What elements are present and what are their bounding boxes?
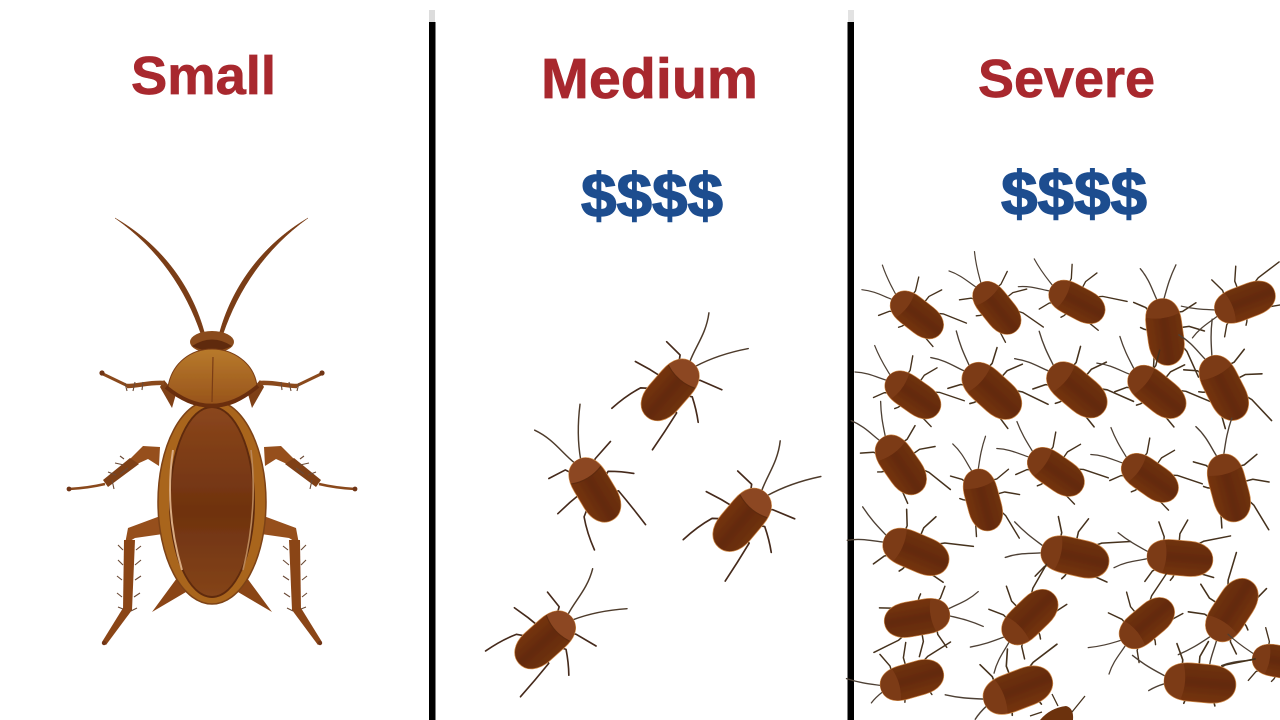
cockroach	[842, 390, 960, 520]
cockroach	[1076, 565, 1199, 682]
cockroach	[938, 632, 1075, 720]
cost: four dollar signs: $$$$	[1001, 160, 1147, 229]
cockroach	[1090, 321, 1219, 443]
cockroach	[957, 556, 1083, 681]
divider: medium / severe	[848, 10, 854, 720]
cockroach	[841, 631, 963, 716]
cockroach	[849, 331, 971, 441]
panel: medium	[474, 47, 830, 709]
cockroach	[515, 398, 659, 560]
cockroach	[1003, 503, 1133, 595]
cockroach	[1174, 251, 1280, 348]
cockroach body	[158, 400, 266, 604]
heading: Medium: Medium	[541, 47, 758, 111]
cockroach	[991, 406, 1115, 519]
cockroach	[599, 297, 757, 461]
icon: large cockroach	[67, 218, 357, 645]
cost: four dollar signs: $$$$	[581, 162, 723, 231]
cockroach pronotum	[166, 349, 258, 407]
cockroach	[941, 240, 1052, 357]
cockroach head	[190, 331, 234, 353]
panel: small	[67, 46, 357, 645]
cockroach	[1085, 412, 1209, 525]
cockroach legs	[67, 370, 357, 645]
cockroach	[1129, 261, 1211, 385]
divider: small / medium	[429, 10, 436, 720]
cockroach	[923, 316, 1057, 445]
cockroach group: four bugs	[474, 297, 830, 709]
cockroach	[1129, 635, 1256, 709]
cockroach	[1220, 617, 1280, 693]
cockroach	[1007, 316, 1142, 444]
heading: Severe: Severe	[978, 49, 1155, 109]
cockroach	[1185, 412, 1280, 544]
cockroach	[474, 551, 635, 709]
cockroach	[670, 425, 830, 592]
cockroach	[865, 581, 988, 664]
partial cockroach at bottom edge	[1030, 694, 1085, 720]
cockroach	[1113, 514, 1232, 589]
cockroach antennae	[115, 218, 308, 334]
cockroach	[843, 488, 978, 597]
cockroach	[1014, 243, 1132, 344]
heading: Small: Small	[131, 46, 276, 106]
cockroach	[1169, 309, 1280, 446]
swarm of cockroaches	[841, 240, 1280, 720]
cockroach	[943, 431, 1030, 551]
cockroach	[1161, 546, 1280, 682]
panel: severe	[841, 49, 1280, 720]
cockroach	[856, 251, 973, 361]
